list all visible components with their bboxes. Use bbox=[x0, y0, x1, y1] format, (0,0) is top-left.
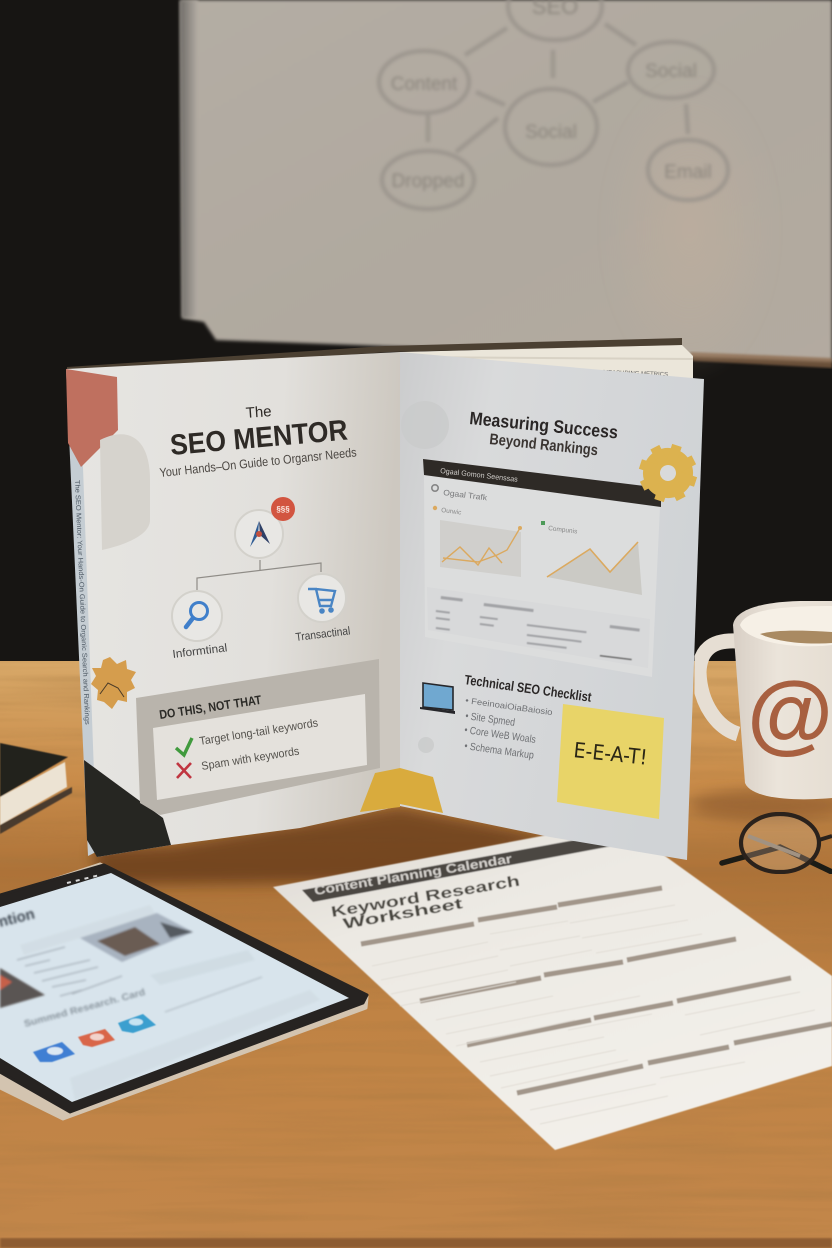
coffee mug bbox=[699, 601, 832, 799]
technical seo checklist bbox=[464, 672, 593, 762]
tablet screen content: Summed Research. Card bbox=[23, 987, 147, 1030]
whiteboard with blurred SEO diagram: Social bbox=[525, 122, 577, 143]
panel: do this, not that bbox=[136, 659, 380, 815]
paper header band bbox=[302, 840, 612, 902]
mug handle bbox=[699, 641, 738, 734]
dashboard panel bbox=[423, 459, 661, 677]
heading: Measuring Success bbox=[469, 408, 619, 443]
dashboard panel: Compunis bbox=[548, 525, 578, 536]
text: not that: Spam with keywords bbox=[201, 746, 300, 773]
yellow fold shape bbox=[360, 768, 400, 812]
dark wall background bbox=[0, 0, 832, 680]
technical seo checklist: Technical SEO Checklist bbox=[464, 672, 593, 705]
dashboard panel: Ogaal Trafk bbox=[443, 488, 489, 502]
tablet screen content bbox=[0, 905, 320, 1100]
text: do this: Target long-tail keywords bbox=[199, 717, 319, 748]
icon: compass bbox=[250, 521, 270, 547]
tablet bbox=[0, 864, 367, 1119]
icon: cart bbox=[308, 589, 335, 613]
faint page ornament bbox=[401, 401, 449, 753]
technical seo checklist: • FeeinoaiOiaBaiosio bbox=[465, 695, 554, 717]
sticky note: E-E-A-T: E-E-A-T! bbox=[572, 738, 649, 770]
whiteboard with blurred SEO diagram: Content bbox=[391, 74, 458, 95]
paper header band: Content Planning Calendar bbox=[313, 852, 513, 898]
left page bbox=[66, 352, 400, 857]
worksheet paper bbox=[273, 835, 832, 1150]
icon: red badge: §§§ bbox=[276, 505, 290, 514]
label: informational: Informtinal bbox=[172, 642, 228, 661]
icon: red badge bbox=[271, 497, 295, 521]
whiteboard with blurred SEO diagram: Dropped bbox=[392, 171, 464, 192]
icon: laptop bbox=[420, 683, 455, 714]
yellow gear bbox=[631, 436, 705, 510]
diagram: SEO nodes bbox=[379, 0, 728, 209]
black corner bbox=[84, 760, 171, 857]
open book: MEASURING METRICS bbox=[603, 370, 668, 378]
title: SEO MENTOR bbox=[169, 415, 349, 462]
worksheet title: Worksheet bbox=[342, 895, 464, 933]
worksheet ruled lines bbox=[372, 905, 815, 1124]
whiteboard with blurred SEO diagram: Email bbox=[664, 162, 712, 183]
orange gear badge bbox=[91, 657, 136, 709]
wooden table bbox=[0, 661, 832, 1248]
label: transactional: Transactinal bbox=[295, 625, 351, 644]
metrics rows bbox=[436, 596, 640, 660]
title: Your Hands–On Guide to Organsr Needs bbox=[159, 445, 357, 480]
chart: organic bbox=[440, 520, 522, 577]
worksheet title bbox=[330, 873, 521, 933]
closed black notebook bbox=[0, 743, 72, 834]
yellow fold shape bbox=[400, 768, 443, 813]
bezel dots bbox=[67, 875, 100, 883]
worksheet section bars bbox=[361, 888, 832, 1093]
dashboard panel: Ourwic bbox=[441, 507, 462, 517]
icon: cross bbox=[177, 763, 191, 778]
spine bbox=[66, 369, 100, 856]
heading bbox=[469, 408, 619, 459]
whiteboard with blurred SEO diagram bbox=[180, 0, 832, 380]
heading: Beyond Rankings bbox=[489, 431, 599, 459]
technical seo checklist: • Schema Markup bbox=[464, 740, 535, 762]
panel: do this, not that: DO THIS, NOT THAT bbox=[158, 693, 263, 722]
icon: check bbox=[176, 738, 192, 755]
red corner tab bbox=[66, 369, 118, 467]
title bbox=[159, 403, 357, 480]
search intent tree bbox=[172, 497, 346, 661]
icon: magnifier bbox=[186, 602, 208, 627]
whiteboard with blurred SEO diagram: Social bbox=[645, 61, 697, 82]
technical seo checklist: • Site Spmed bbox=[465, 710, 516, 729]
back page block bbox=[400, 345, 693, 380]
technical seo checklist: • Core WeB Woals bbox=[464, 724, 537, 746]
reading glasses bbox=[722, 814, 832, 872]
faint blob bbox=[100, 434, 150, 550]
spine: The SEO Mentor: Your Hands-On Guide to Organic Search and Rankings bbox=[73, 480, 90, 725]
right page bbox=[400, 352, 705, 860]
sticky note: E-E-A-T bbox=[557, 704, 664, 819]
worksheet title: Keyword Research bbox=[330, 873, 521, 921]
title: The bbox=[245, 403, 272, 422]
chart: competitors bbox=[547, 542, 642, 595]
open book bbox=[66, 338, 705, 860]
icon: at sign: @ bbox=[747, 663, 832, 762]
social icons bbox=[33, 1014, 156, 1062]
dashboard panel: Ogaal Gomon Seenssas bbox=[440, 466, 519, 484]
